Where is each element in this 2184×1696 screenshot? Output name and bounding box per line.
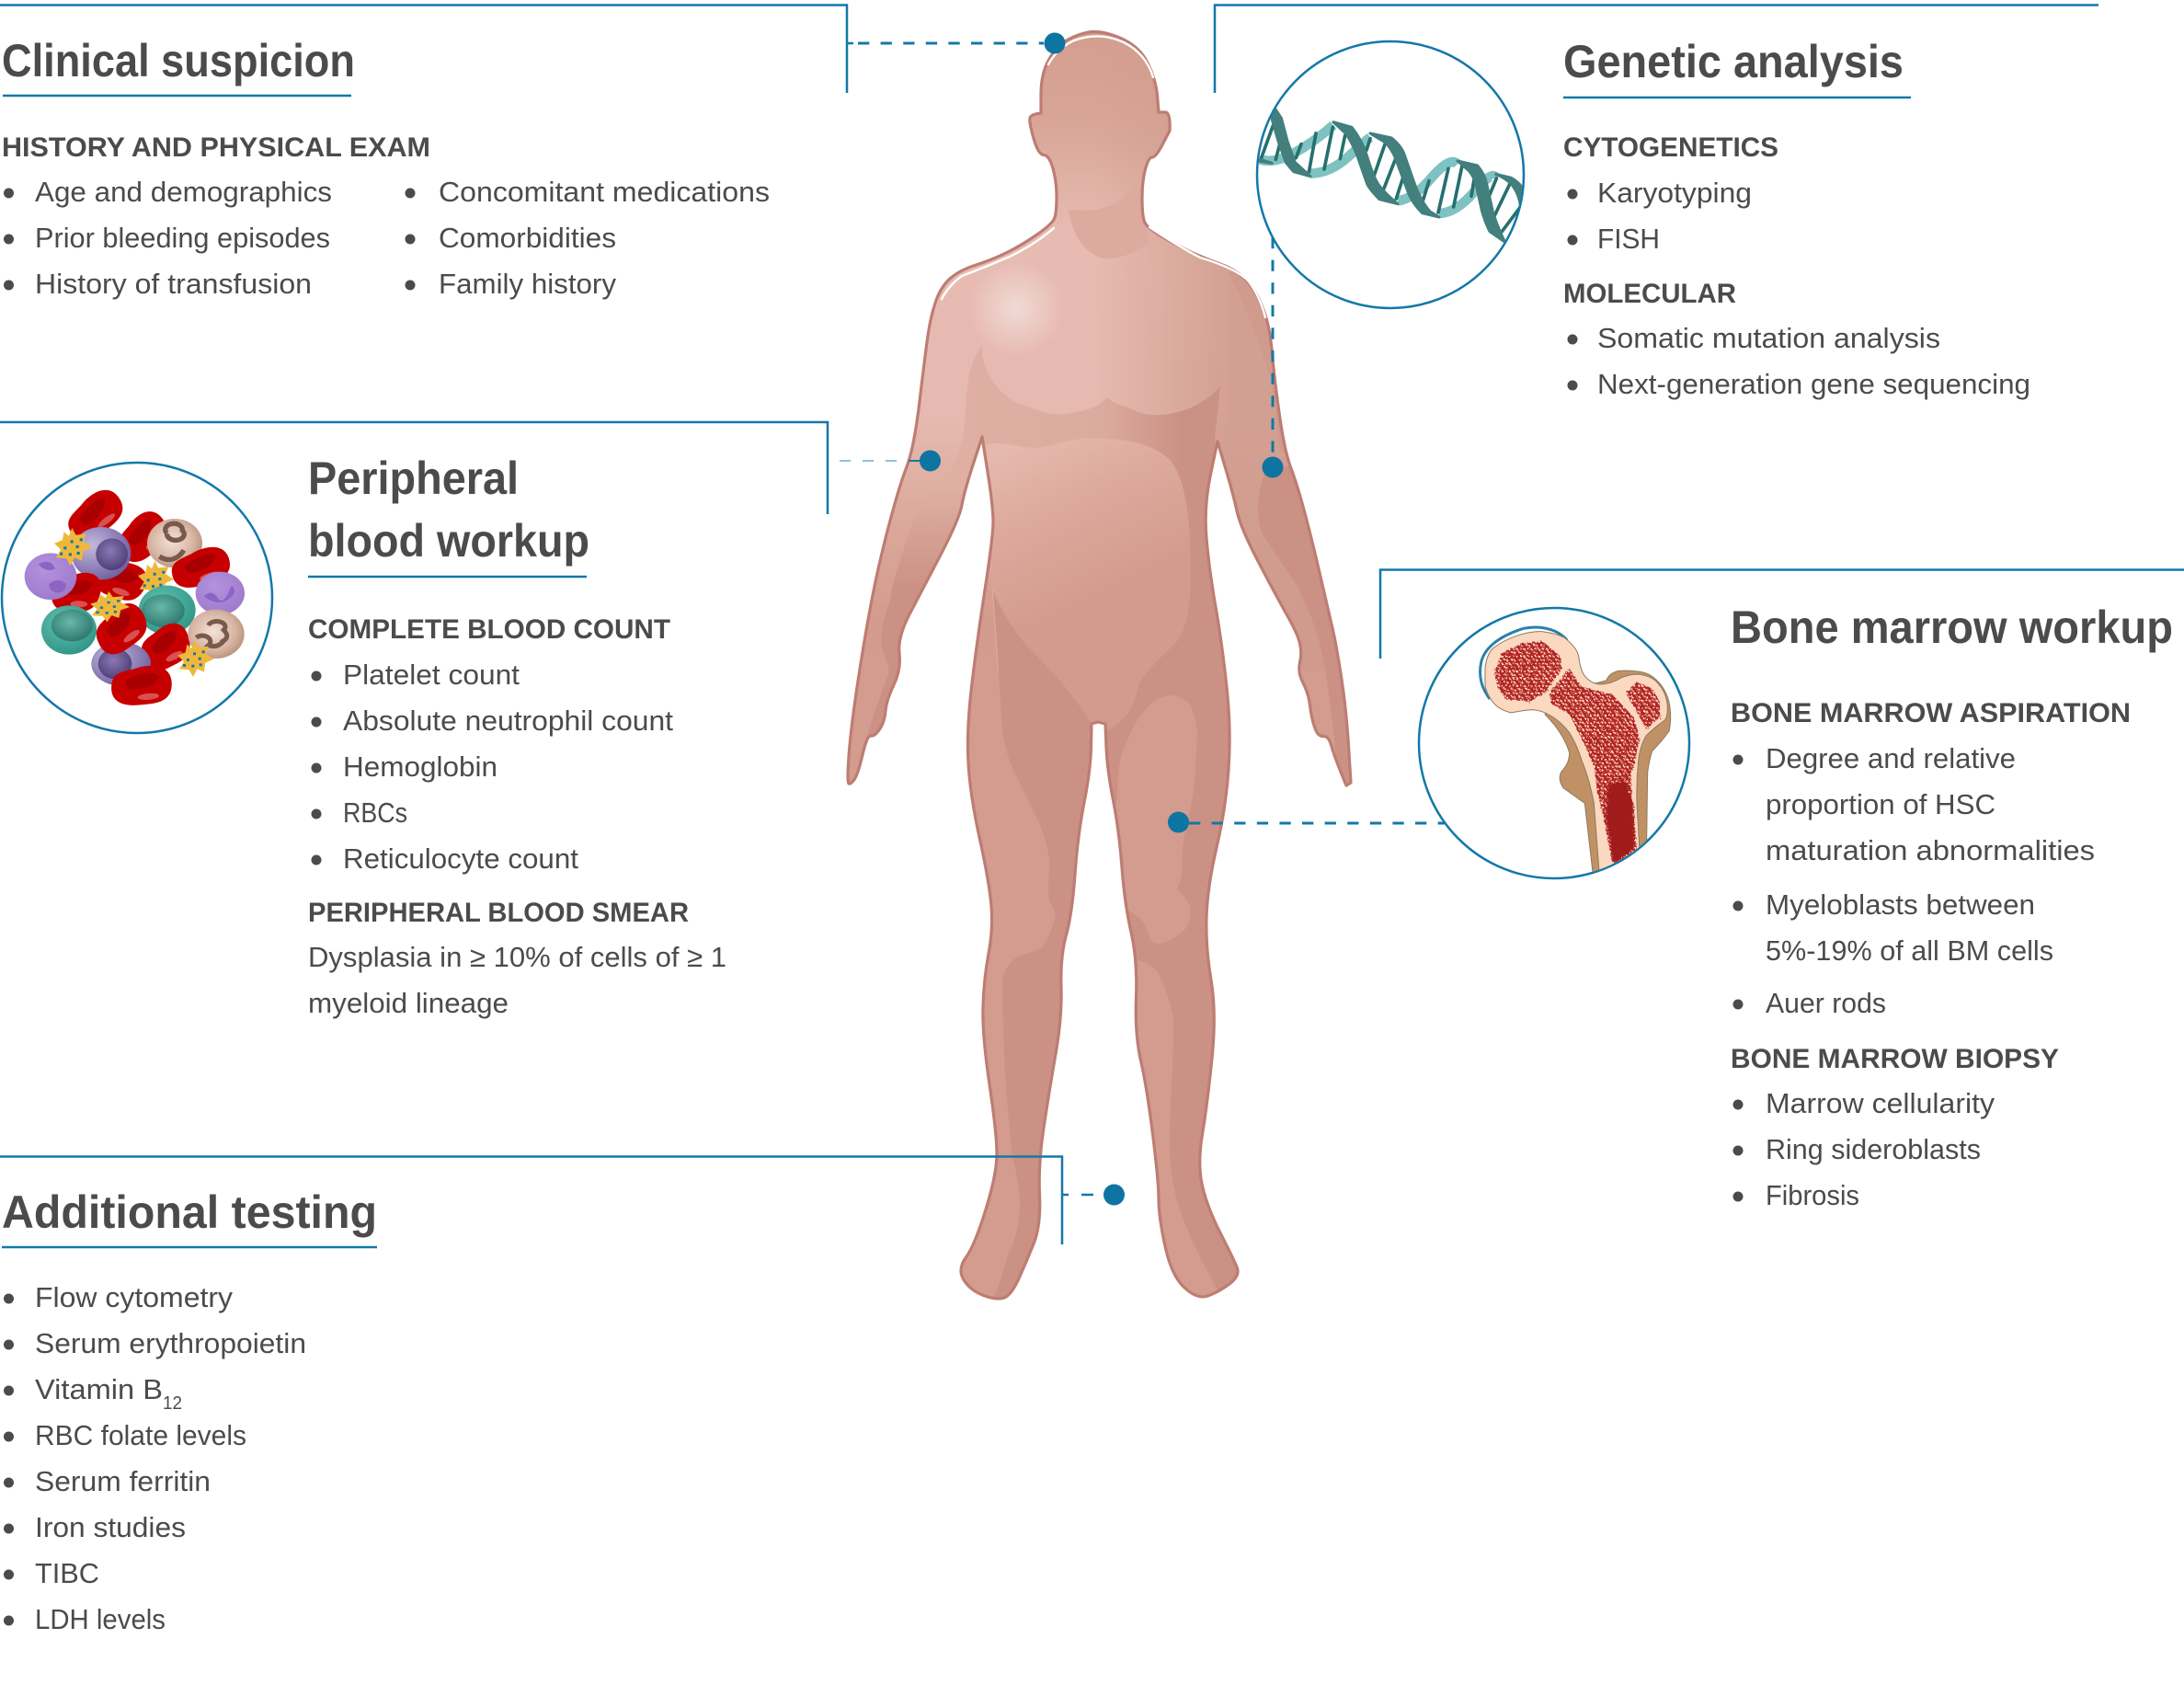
list: bone marrow aspiration	[1732, 742, 2095, 1019]
list: complete blood count: Platelet count	[343, 659, 520, 691]
heading: peripheral blood workup: blood workup	[308, 515, 589, 567]
list: bone marrow aspiration: 5%-19% of all BM cells	[1766, 934, 2053, 967]
text: dysplasia: myeloid lineage	[308, 987, 509, 1019]
list: bone marrow aspiration: Myeloblasts between	[1766, 888, 2035, 921]
heading underline	[3, 95, 351, 97]
list: additional tests: LDH levels	[35, 1603, 166, 1635]
text: dysplasia: Dysplasia in ≥ 10% of cells of ≥ 1	[308, 941, 726, 973]
list: history column 1: History of transfusion	[35, 268, 312, 300]
list: cytogenetics: Karyotyping	[1597, 177, 1752, 209]
panel: peripheral blood workup	[0, 422, 828, 1019]
list: cytogenetics: FISH	[1597, 223, 1660, 255]
connector: peripheral blood to arm	[840, 451, 941, 471]
heading: clinical suspicion: Clinical suspicion	[2, 35, 355, 86]
list: complete blood count: Hemoglobin	[343, 751, 497, 783]
list: additional tests: TIBC	[35, 1557, 99, 1589]
text: dysplasia	[308, 941, 726, 1019]
heading underline	[1563, 97, 1911, 98]
list: complete blood count: RBCs	[343, 796, 407, 829]
panel frame	[0, 6, 847, 93]
panel frame	[1215, 6, 2098, 93]
list: bone marrow aspiration: Auer rods	[1766, 987, 1886, 1019]
connector: genetic analysis to arm	[1262, 237, 1284, 478]
list: additional tests: Vitamin B	[35, 1373, 163, 1405]
list: complete blood count: Reticulocyte count	[343, 842, 578, 875]
list: complete blood count	[311, 659, 673, 875]
list: bone marrow biopsy: Ring sideroblasts	[1766, 1133, 1981, 1165]
heading underline	[2, 1246, 377, 1248]
list: molecular: Somatic mutation analysis	[1597, 322, 1940, 354]
list: complete blood count: Absolute neutrophil count	[343, 705, 673, 737]
list: history column 2	[405, 176, 770, 300]
panel frame	[0, 1157, 1062, 1244]
list: additional tests	[4, 1281, 306, 1635]
subheading: complete blood count: COMPLETE BLOOD COUNT	[308, 614, 670, 645]
subheading: bone marrow aspiration: BONE MARROW ASPIRATION	[1731, 698, 2131, 728]
panel frame	[0, 422, 828, 514]
subheading: history and physical exam: HISTORY AND PHYSICAL EXAM	[2, 132, 430, 163]
connector: additional testing to leg	[1062, 1185, 1125, 1205]
list: additional tests: Serum erythropoietin	[35, 1327, 306, 1359]
subheading: molecular: MOLECULAR	[1563, 279, 1736, 309]
list: bone marrow biopsy	[1732, 1087, 1995, 1211]
list: history column 1: Age and demographics	[35, 176, 332, 208]
heading: peripheral blood workup	[308, 453, 589, 567]
list: history column 1: Prior bleeding episodes	[35, 222, 330, 254]
icon: femur bone marrow	[1419, 608, 1689, 883]
list: cytogenetics	[1567, 177, 1752, 255]
heading: genetic analysis: Genetic analysis	[1563, 36, 1904, 87]
subheading: peripheral blood smear: PERIPHERAL BLOOD SMEAR	[308, 898, 689, 928]
list: additional tests: Flow cytometry	[35, 1281, 234, 1313]
panel frame	[1380, 570, 2184, 659]
list: history column 2: Comorbidities	[439, 222, 616, 254]
subheading: bone marrow biopsy: BONE MARROW BIOPSY	[1731, 1044, 2059, 1074]
list: history column 2: Concomitant medications	[439, 176, 770, 208]
list: additional tests: RBC folate levels	[35, 1419, 246, 1451]
list: bone marrow aspiration: proportion of HSC	[1766, 788, 1995, 820]
list: history column 2: Family history	[439, 268, 616, 300]
list: additional tests: 12	[163, 1393, 182, 1414]
list: bone marrow aspiration: Degree and relative	[1766, 742, 2016, 774]
heading underline	[308, 576, 587, 578]
panel: bone marrow workup	[1380, 570, 2184, 1211]
list: bone marrow biopsy: Fibrosis	[1766, 1179, 1859, 1211]
connector: bone marrow to thigh	[1168, 811, 1446, 833]
list: bone marrow aspiration: maturation abnormalities	[1766, 834, 2095, 866]
list: bone marrow biopsy: Marrow cellularity	[1766, 1087, 1995, 1119]
heading: additional testing: Additional testing	[2, 1186, 377, 1238]
panel: clinical suspicion	[0, 6, 847, 300]
list: additional tests: Serum ferritin	[35, 1465, 211, 1497]
connector: clinical suspicion to head	[847, 33, 1065, 53]
list: molecular: Next-generation gene sequencing	[1597, 368, 2030, 400]
human body figure	[848, 28, 1361, 1315]
heading: peripheral blood workup: Peripheral	[308, 453, 519, 504]
panel: genetic analysis	[1215, 6, 2098, 400]
icon: DNA helix	[1257, 41, 1525, 308]
panel: additional testing	[0, 1157, 1062, 1635]
list: molecular	[1567, 322, 2030, 400]
list: additional tests: Iron studies	[35, 1511, 186, 1543]
icon: blood cells	[2, 463, 272, 733]
subheading: cytogenetics: CYTOGENETICS	[1563, 132, 1778, 163]
list: history column 1	[4, 176, 332, 300]
